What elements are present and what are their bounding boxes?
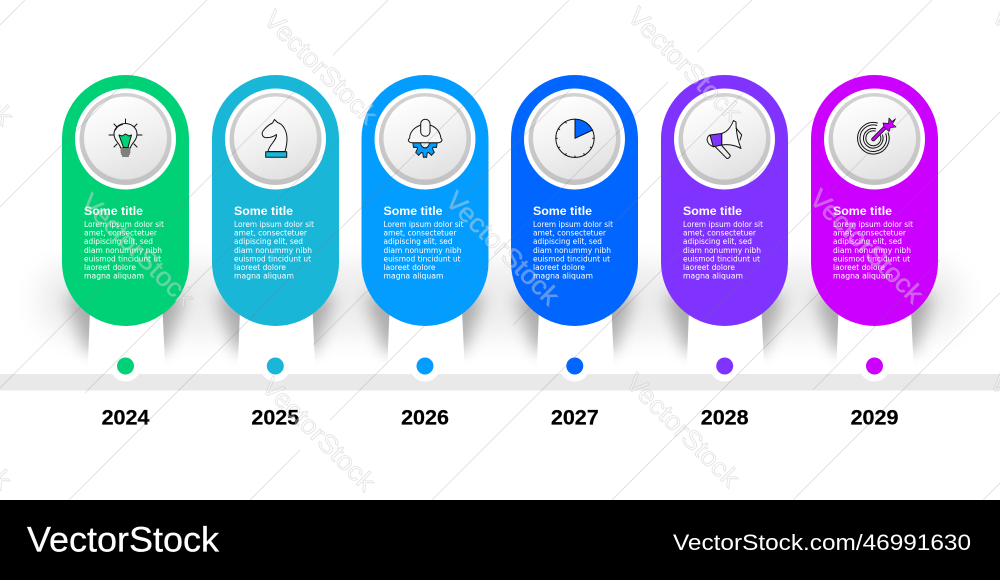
text block (384, 220, 464, 280)
pill (511, 75, 638, 326)
text block (683, 220, 763, 280)
timeline dot (709, 350, 740, 382)
stem (387, 310, 465, 374)
text block: diam nonummy nibh (683, 246, 761, 255)
text block: magna aliquam (84, 272, 144, 280)
text block: magna aliquam (234, 272, 294, 280)
timeline dot (110, 350, 141, 382)
heading: Some title (533, 204, 592, 218)
text block: adipiscing elit, sed (384, 237, 453, 246)
text block: amet, consectetuer (533, 229, 607, 238)
text block (533, 220, 613, 280)
footer bar (0, 500, 1000, 580)
heading: Some title (683, 204, 742, 218)
footer brand: VectorStock (27, 520, 220, 560)
timeline dot (859, 350, 890, 382)
panel: 2025 (212, 75, 339, 430)
text block: amet, consectetuer (84, 229, 158, 238)
year: 2026 (401, 406, 449, 430)
pill (62, 75, 189, 326)
text block: diam nonummy nibh (84, 246, 162, 255)
watermark text: VectorStock (440, 185, 566, 312)
icon button (524, 88, 625, 190)
heading: Some title (84, 204, 143, 218)
icon button (824, 88, 925, 190)
text block: laoreet dolore (384, 263, 436, 272)
timeline dot (410, 350, 440, 382)
text block: euismod tincidunt ut (533, 254, 610, 263)
text block: adipiscing elit, sed (84, 237, 153, 246)
broad soft pill shadows (40, 265, 960, 335)
heading: Some title (384, 204, 443, 218)
icon: light bulb (109, 119, 142, 156)
timeline bar (0, 374, 1000, 390)
watermark text: VectorStock (256, 371, 382, 498)
text block: laoreet dolore (683, 263, 735, 272)
text block: magna aliquam (533, 272, 593, 280)
text block: magna aliquam (833, 272, 893, 280)
text block: magna aliquam (683, 272, 743, 280)
icon button (75, 88, 176, 190)
icon: target with arrow (858, 118, 896, 154)
text block: Lorem ipsum dolor sit (533, 220, 613, 229)
text block (234, 220, 314, 280)
timeline dot (260, 350, 291, 382)
heading: Some title (234, 204, 293, 218)
text block: euismod tincidunt ut (384, 254, 461, 263)
text block: diam nonummy nibh (384, 246, 462, 255)
text block: euismod tincidunt ut (84, 254, 161, 263)
stem (836, 310, 914, 374)
footer image id: VectorStock.com/46991630 (673, 530, 971, 555)
text block: adipiscing elit, sed (533, 237, 602, 246)
stem (88, 310, 166, 374)
text block: amet, consectetuer (234, 229, 308, 238)
text block: laoreet dolore (84, 263, 136, 272)
text block: magna aliquam (384, 272, 444, 280)
icon button (225, 88, 326, 190)
text block (84, 220, 164, 280)
stem (238, 310, 316, 374)
stem (686, 310, 764, 374)
stem (536, 310, 614, 374)
text block: amet, consectetuer (683, 229, 757, 238)
text block: amet, consectetuer (833, 229, 907, 238)
text block: euismod tincidunt ut (683, 254, 760, 263)
text block: Lorem ipsum dolor sit (384, 220, 464, 229)
pill (661, 75, 788, 326)
text block: amet, consectetuer (384, 229, 457, 238)
year: 2027 (551, 406, 599, 430)
icon: hard hat with gear (408, 119, 442, 157)
watermark text: VectorStock (804, 183, 930, 310)
icon: megaphone (707, 120, 742, 158)
watermark text: VectorStock (622, 1, 748, 128)
panel: 2024 (62, 75, 189, 430)
dark shadows beside the stems (66, 295, 934, 352)
panel: 2028 (661, 75, 788, 430)
text block: laoreet dolore (234, 263, 286, 272)
panel: 2027 (511, 75, 638, 430)
text block: adipiscing elit, sed (683, 237, 752, 246)
text block: laoreet dolore (533, 263, 585, 272)
text block: laoreet dolore (833, 263, 885, 272)
year: 2025 (251, 406, 299, 430)
watermark text: VectorStock (75, 187, 201, 314)
watermark text: VectorStock (620, 367, 746, 494)
pill (811, 75, 938, 326)
year: 2024 (102, 406, 149, 430)
year: 2029 (851, 406, 898, 430)
pill (362, 75, 488, 326)
panel: 2026 (362, 75, 488, 430)
panel: 2029 (811, 75, 938, 430)
text block: Lorem ipsum dolor sit (84, 220, 164, 229)
text block: Lorem ipsum dolor sit (683, 220, 763, 229)
text block: adipiscing elit, sed (234, 237, 303, 246)
text block: diam nonummy nibh (234, 246, 312, 255)
icon: clock quarter (556, 119, 594, 158)
text block: euismod tincidunt ut (234, 254, 311, 263)
text block: adipiscing elit, sed (833, 237, 902, 246)
text block: Lorem ipsum dolor sit (833, 220, 913, 229)
pill (212, 75, 339, 326)
heading: Some title (833, 204, 892, 218)
text block: diam nonummy nibh (833, 246, 911, 255)
text block: Lorem ipsum dolor sit (234, 220, 314, 229)
icon button (374, 88, 476, 190)
icon button (674, 88, 775, 190)
icon: chess knight (262, 120, 287, 157)
year: 2028 (701, 406, 749, 430)
text block (833, 220, 913, 280)
watermark text: VectorStock (258, 4, 384, 131)
timeline dot (559, 350, 590, 382)
text block: diam nonummy nibh (533, 246, 611, 255)
text block: euismod tincidunt ut (833, 254, 910, 263)
